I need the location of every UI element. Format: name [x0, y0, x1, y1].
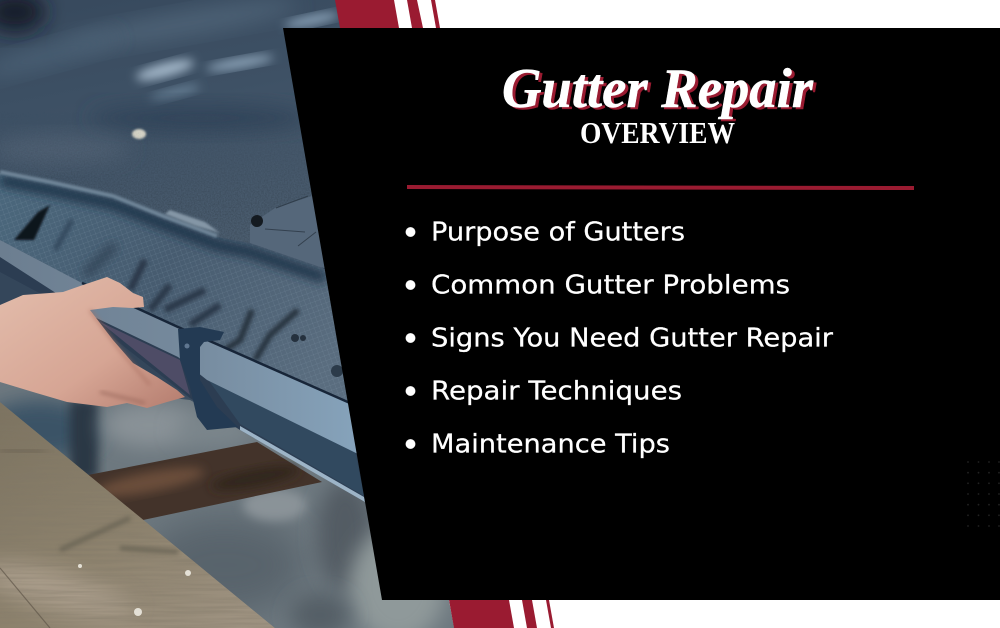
divider line: [407, 185, 914, 190]
rusty pipe: [88, 442, 322, 520]
gutter bracket: [178, 327, 238, 430]
item: Common Gutter Problems: Common Gutter Problems: [431, 270, 790, 300]
roof shingle surface: [0, 0, 340, 243]
wooden plank: [0, 400, 280, 628]
roof shingle broken edge: [0, 172, 332, 270]
item: Purpose of Gutters: Purpose of Gutters: [431, 218, 685, 248]
photo base: [0, 173, 454, 628]
bottom accent stripes: [449, 600, 554, 628]
subtitle: Overview: OVERVIEW: [580, 115, 735, 150]
gutter top strip: [0, 240, 358, 454]
title: Gutter Repair: Gutter Repair: [502, 58, 814, 120]
dot grid decoration: [967, 461, 1000, 527]
photo: hand repairing gutter: [0, 0, 460, 628]
gutter: [0, 240, 366, 502]
hand: [0, 277, 185, 408]
bullet list: [406, 218, 833, 460]
item: Maintenance Tips: Maintenance Tips: [431, 430, 670, 460]
title: Gutter Repair: Gutter Repair: [505, 60, 817, 122]
lower background: [0, 378, 460, 628]
top accent stripes: [335, 0, 440, 28]
item: Repair Techniques: Repair Techniques: [431, 376, 682, 406]
item: Signs You Need Gutter Repair: Signs You Need Gutter Repair: [431, 324, 833, 354]
panel: black content panel: [283, 28, 1000, 600]
drip edge mesh: [0, 173, 348, 400]
